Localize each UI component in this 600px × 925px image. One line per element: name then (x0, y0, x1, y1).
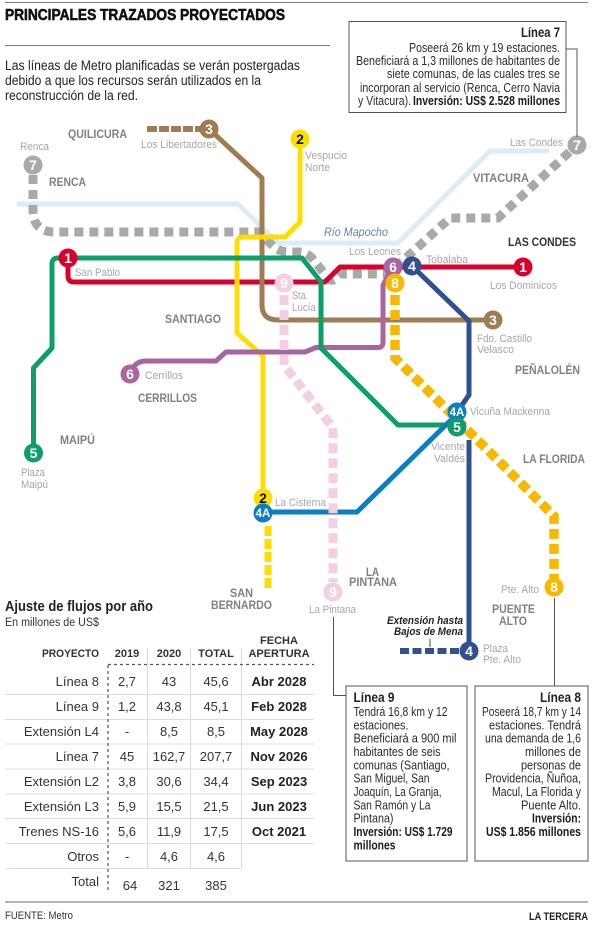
callout: Extensión hasta Bajos de Mena (387, 615, 463, 647)
table: ajuste de flujos: 5,9 (118, 799, 136, 814)
table: ajuste de flujos: 21,5 (203, 799, 229, 814)
line 7 route (33, 145, 577, 280)
station: 6 Los Leones (384, 258, 402, 276)
river: Río Mapocho (17, 151, 549, 243)
station and commune labels: Los Leones (349, 246, 401, 258)
station: 9 La Pintana: 9 (329, 584, 337, 600)
station and commune labels: CERRILLOS (138, 393, 197, 405)
table: ajuste de flujos: 385 (205, 878, 227, 893)
station: 4A La Cisterna: 4A (256, 508, 270, 520)
station and commune labels: San Pablo (75, 267, 120, 279)
station and commune labels: Velasco (477, 344, 514, 356)
table: ajuste de flujos: 321 (158, 878, 180, 893)
station and commune labels: PEÑALOLÉN (515, 364, 580, 377)
station and commune labels: Sta. (292, 290, 308, 302)
panel: Línea 8: Puente Alto. (521, 798, 581, 812)
line 4A route (263, 414, 457, 512)
table: ajuste de flujos: May 2028 (250, 724, 308, 739)
station and commune labels: PINTANA (349, 577, 397, 589)
station: 8 Los Leones (386, 274, 404, 292)
table: ajuste de flujos: 162,7 (153, 749, 185, 764)
panel: Línea 8: estaciones. Tendrá (489, 718, 581, 732)
station: 4A Vicuña Mackenna: 4A (450, 407, 464, 419)
station: 9 Sta. Lucía: 9 (280, 275, 288, 291)
station: 5 Plaza Maipú: 5 (30, 445, 38, 461)
table: ajuste de flujos: 4,6 (160, 849, 178, 864)
panel: Línea 8: Poseerá 18,7 km y 14 (482, 705, 581, 719)
station and commune labels: LA (366, 567, 379, 579)
station: 1 San Pablo (58, 248, 78, 268)
station and commune labels: Maipú (21, 479, 48, 491)
station: 1 Los Dominicos (514, 258, 532, 276)
line 9 route (284, 295, 333, 582)
panel: Línea 9: Beneficiará a 900 mil (354, 732, 456, 746)
panel: Línea 9: San Miguel, San (354, 772, 430, 786)
table: ajuste de flujos: PROYECTO (42, 648, 99, 660)
station: 4 Plaza Puente Alto (460, 642, 478, 660)
station: 4 Tobalaba: 4 (408, 258, 416, 274)
panel: Línea 9: Tendrá 16,8 km y 12 (354, 705, 448, 719)
panel: Línea 7: incorporan al servicio (Renca, Cerro Navia (360, 81, 560, 95)
station and commune labels (20, 129, 585, 666)
panel: Línea 8: millones de (525, 745, 581, 759)
table: ajuste de flujos: 64 (123, 878, 137, 893)
table: ajuste de flujos: Extensión L2 (24, 774, 99, 789)
table: ajuste de flujos: Trenes NS-16 (19, 824, 99, 839)
station: 9 La Pintana (324, 582, 342, 602)
station: 2 La Cisterna (254, 488, 272, 508)
table: ajuste de flujos: Línea 9 (56, 699, 99, 714)
table: ajuste de flujos: 8,5 (160, 724, 178, 739)
table: ajuste de flujos: 2020 (157, 648, 181, 660)
station and commune labels: RENCA (49, 177, 86, 189)
intro text: Las líneas de Metro planificadas se verán postergadas (5, 58, 300, 73)
station and commune labels: PUENTE (492, 604, 535, 616)
panel: Línea 9: Inversión: US$ 1.729 (354, 825, 453, 839)
station: 4 Plaza Puente Alto: 4 (465, 643, 473, 659)
station: 2 La Cisterna: 2 (259, 490, 267, 506)
panel: Línea 9: Línea 9 (354, 690, 394, 705)
station and commune labels: Plaza (21, 467, 46, 479)
station and commune labels: SANTIAGO (165, 314, 221, 326)
station: 6 Cerrillos: 6 (126, 366, 134, 382)
station: 5 Plaza Maipú (24, 444, 43, 462)
table: ajuste de flujos: 43 (162, 674, 176, 689)
table: ajuste de flujos: 2,7 (118, 674, 136, 689)
table: ajuste de flujos: 17,5 (203, 824, 229, 839)
panel: Línea 9: Pintana) (354, 812, 394, 826)
station and commune labels: VITACURA (473, 173, 529, 185)
station and commune labels: SAN (230, 588, 253, 600)
panel: Línea 9: comunas (Santiago, (354, 758, 450, 772)
line 6 route (130, 267, 393, 374)
station and commune labels: Río Mapocho (324, 227, 389, 239)
table: ajuste de flujos: 8,5 (207, 724, 225, 739)
table: ajuste de flujos: 30,6 (156, 774, 182, 789)
station and commune labels: Las Condes (510, 137, 563, 149)
station and commune labels: BERNARDO (211, 600, 272, 612)
panel: Línea 9: Joaquín, La Granja, (354, 785, 442, 799)
station and commune labels: QUILICURA (68, 129, 127, 141)
panel: Línea 7: Inversión: US$ 2.528 millones (413, 94, 560, 108)
station and commune labels: Lucía (292, 302, 317, 314)
table: ajuste de flujos: Otros (67, 849, 99, 864)
station and commune labels: Cerrillos (145, 370, 183, 382)
station: 8 Los Leones: 8 (391, 275, 399, 291)
table: ajuste de flujos: 2019 (115, 648, 139, 660)
station: 5 Vicente Valdés (448, 418, 466, 436)
table: ajuste de flujos: 207,7 (200, 749, 232, 764)
station: 3 Fdo. Castillo Velasco (484, 310, 502, 330)
panel: Línea 7: Línea 7 (521, 25, 560, 40)
station and commune labels: Vicente (431, 441, 465, 453)
table: ajuste de flujos: 43,8 (156, 699, 182, 714)
intro text: debido a que los recursos serán utilizados en la (5, 73, 261, 88)
table: ajuste de flujos: Línea 7 (56, 749, 99, 764)
station: 2 Vespucio Norte: 2 (296, 131, 304, 147)
station and commune labels: Vicuña Mackenna (470, 406, 551, 418)
station and commune labels: Valdés (434, 453, 465, 465)
panel: Línea 9: habitantes de seis (354, 745, 440, 759)
table: ajuste de flujos: Abr 2028 (252, 674, 306, 689)
table: ajuste de flujos: 5,6 (118, 824, 136, 839)
table heading: Ajuste de flujos por año (5, 599, 153, 615)
panel: Línea 7: siete comunas, de las cuales tres se (387, 67, 560, 81)
panel: Línea 7: Poseerá 26 km y 19 estaciones. (409, 41, 560, 55)
table: ajuste de flujos: 45 (120, 749, 134, 764)
title: PRINCIPALES TRAZADOS PROYECTADOS (5, 7, 285, 24)
table: ajuste de flujos: Jun 2023 (251, 799, 307, 814)
station: 6 Los Leones: 6 (389, 259, 397, 275)
station and commune labels: Los Dominicos (490, 280, 557, 292)
line 8 route (395, 295, 554, 580)
table: ajuste de flujos: Extensión L3 (24, 799, 99, 814)
table heading: En millones de US$ (5, 617, 100, 629)
station and commune labels: La Pintana (309, 604, 357, 616)
station: 9 Sta. Lucía (274, 274, 294, 292)
station and commune labels: Los Libertadores (141, 139, 217, 151)
table heading (5, 599, 153, 629)
table: ajuste de flujos: Línea 8 (56, 674, 99, 689)
station: 2 Vespucio Norte (290, 130, 310, 148)
metro map (17, 120, 586, 666)
panel: Línea 8: Macul, La Florida y (492, 785, 582, 799)
callout: Extensión hasta Bajos de Mena: Bajos de Mena (394, 626, 463, 638)
table: ajuste de flujos: 1,2 (118, 699, 136, 714)
station and commune labels: Pte. Alto (501, 584, 539, 596)
station: 4A Vicuña Mackenna (448, 402, 466, 422)
panel: Línea 8: Providencia, Ñuñoa, (485, 772, 581, 786)
table: ajuste de flujos (5, 635, 314, 893)
source: FUENTE: Metro (5, 910, 73, 922)
credit: La Tercera: LA TERCERA (529, 911, 588, 923)
table: ajuste de flujos: 34,4 (203, 774, 229, 789)
station and commune labels: Vespucio (305, 150, 347, 162)
station: 3 Los Libertadores (200, 120, 218, 138)
table: ajuste de flujos: Extensión L4 (24, 724, 99, 739)
station and commune labels: Renca (20, 141, 50, 153)
table: ajuste de flujos: Feb 2028 (251, 699, 307, 714)
panel: Línea 8: US$ 1.856 millones (486, 825, 581, 839)
panel: Línea 9 (334, 617, 467, 861)
table: ajuste de flujos: Oct 2021 (252, 824, 306, 839)
panel: Línea 9: estaciones. (354, 718, 408, 732)
table: ajuste de flujos: 3,8 (118, 774, 136, 789)
line 4 route (400, 266, 469, 651)
station: 6 Cerrillos (120, 364, 140, 384)
panel: Línea 9: San Ramón y La (354, 798, 431, 812)
station and commune labels: LAS CONDES (508, 237, 576, 249)
panel: Línea 8: una demanda de 1,6 (485, 732, 581, 746)
table: ajuste de flujos: Nov 2026 (250, 749, 308, 764)
table: ajuste de flujos: 4,6 (207, 849, 225, 864)
station: 8 Puente Alto (544, 578, 564, 596)
table: ajuste de flujos: - (125, 724, 129, 739)
panel: Línea 8 (475, 598, 588, 861)
station and commune labels: Plaza (483, 643, 509, 655)
station: 1 San Pablo: 1 (64, 250, 72, 266)
station and commune labels: La Cisterna (275, 497, 327, 509)
station and commune labels: Pte. Alto (483, 654, 521, 666)
station and commune labels: Norte (305, 162, 330, 174)
panel: Línea 9: millones (354, 838, 396, 852)
station and commune labels: MAIPÚ (60, 434, 95, 447)
table: ajuste de flujos: Total (72, 874, 99, 889)
station: 4 Tobalaba (402, 256, 422, 276)
station: 5 Vicente Valdés: 5 (453, 419, 461, 435)
table: ajuste de flujos: - (125, 849, 129, 864)
panel: Línea 8: personas de (521, 758, 581, 772)
station: 7 Renca: 7 (29, 157, 37, 173)
panel: Línea 8: Línea 8 (540, 690, 581, 705)
panel: Línea 7: y Vitacura). (358, 94, 411, 108)
station: 4A La Cisterna (254, 504, 272, 522)
table: ajuste de flujos: 11,9 (157, 824, 181, 839)
table: ajuste de flujos: 45,6 (203, 674, 229, 689)
table: ajuste de flujos: Sep 2023 (251, 774, 307, 789)
intro text (5, 58, 300, 103)
station and commune labels: ALTO (499, 616, 527, 628)
station: 7 Renca (24, 156, 42, 174)
station: 7 Las Condes: 7 (573, 137, 581, 153)
panel: Línea 7: Beneficiará a 1,3 millones de habitantes de (356, 54, 560, 68)
line 1 route (68, 258, 523, 282)
intro text: reconstrucción de la red. (5, 88, 138, 103)
station: 7 Las Condes (568, 136, 586, 154)
table: ajuste de flujos: FECHA (260, 635, 298, 647)
panel: Línea 8: Inversión: (532, 812, 581, 826)
table: ajuste de flujos: APERTURA (248, 648, 310, 660)
line 3 route (147, 129, 493, 320)
station: 1 Los Dominicos: 1 (519, 259, 527, 275)
station and commune labels: Tobalaba (426, 254, 469, 266)
station: 3 Los Libertadores: 3 (205, 121, 213, 137)
station: 8 Puente Alto: 8 (550, 579, 558, 595)
line 2 route (237, 139, 300, 588)
line 5 route (34, 258, 457, 453)
table: ajuste de flujos: 15,5 (156, 799, 182, 814)
station: 3 Fdo. Castillo Velasco: 3 (489, 312, 497, 328)
station and commune labels: LA FLORIDA (523, 454, 585, 466)
table: ajuste de flujos: TOTAL (198, 648, 234, 660)
panel: Línea 7 (349, 22, 577, 137)
callout: Extensión hasta Bajos de Mena: Extensión hasta (387, 615, 463, 627)
station and commune labels: Fdo. Castillo (477, 333, 532, 345)
table: ajuste de flujos: 45,1 (203, 699, 229, 714)
